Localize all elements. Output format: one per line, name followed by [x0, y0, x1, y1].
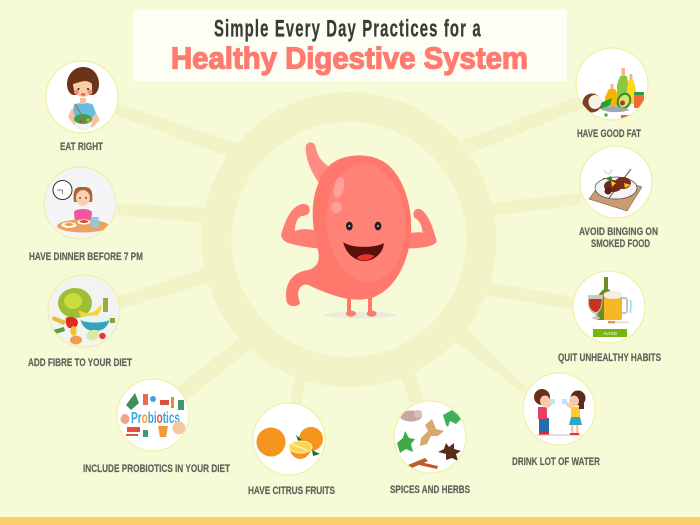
item: eat right [46, 61, 118, 153]
label: avoid binging on smoked food: AVOID BINGING ON [579, 226, 658, 238]
icon: vegetables and fruits [52, 288, 115, 344]
item: drink lot of water [512, 373, 600, 468]
left arm [281, 204, 323, 248]
icon: girl at table with clock [53, 180, 109, 232]
icon: woman eating salad [67, 67, 100, 130]
icon: oils, coconut, avocado and fish [582, 68, 644, 118]
item: quit unhealthy habits [558, 271, 661, 364]
item: have good fat [576, 48, 648, 140]
right arm [405, 209, 437, 248]
label: include probiotics in your diet: INCLUDE PROBIOTICS IN YOUR DIET [83, 463, 230, 475]
label: spices and herbs: SPICES AND HERBS [390, 484, 470, 496]
item: have dinner before 7 pm [29, 167, 143, 263]
label: have citrus fruits: HAVE CITRUS FRUITS [248, 485, 335, 497]
label: have good fat: HAVE GOOD FAT [577, 128, 641, 140]
legs [346, 297, 377, 317]
label: quit unhealthy habits: QUIT UNHEALTHY HABITS [558, 352, 661, 364]
connector spokes [115, 95, 583, 405]
shadow [324, 312, 396, 318]
central ring [216, 107, 482, 372]
belly highlight [323, 161, 409, 285]
title line 2: Healthy Digestive System [171, 40, 528, 76]
icon: children drinking water [534, 389, 586, 436]
label: have dinner before 7 pm: HAVE DINNER BEFORE 7 PM [29, 251, 143, 263]
icon: spices [397, 410, 462, 469]
label: drink lot of water: DRINK LOT OF WATER [512, 456, 600, 468]
item: have citrus fruits [248, 403, 335, 497]
icon: wine, beer and cigarette: AVOID [603, 331, 618, 336]
mouth [344, 243, 383, 261]
icon: probiotics lettering with foods [120, 393, 186, 437]
label: avoid binging on smoked food: SMOKED FOOD [591, 238, 650, 250]
title line 1: Simple Every Day Practices for a [214, 16, 481, 43]
icon: smoked skewers on plate [589, 169, 642, 211]
icon: oranges [256, 427, 323, 459]
item: avoid binging on smoked food [579, 146, 662, 250]
item: add fibre to your diet [28, 275, 132, 369]
item: spices and herbs [390, 401, 470, 496]
stomach body [286, 155, 411, 306]
item: include probiotics [83, 379, 230, 475]
title panel [133, 10, 567, 81]
central stomach character [281, 142, 437, 318]
eyes [346, 222, 353, 230]
bottom bar [0, 517, 700, 525]
label: add fibre to your diet: ADD FIBRE TO YOUR DIET [28, 357, 132, 369]
esophagus [306, 142, 330, 183]
shine [332, 176, 346, 199]
icon: probiotics lettering with foods: Probiotics [131, 410, 180, 427]
label: eat right: EAT RIGHT [60, 141, 103, 153]
avoid badge [593, 329, 627, 337]
